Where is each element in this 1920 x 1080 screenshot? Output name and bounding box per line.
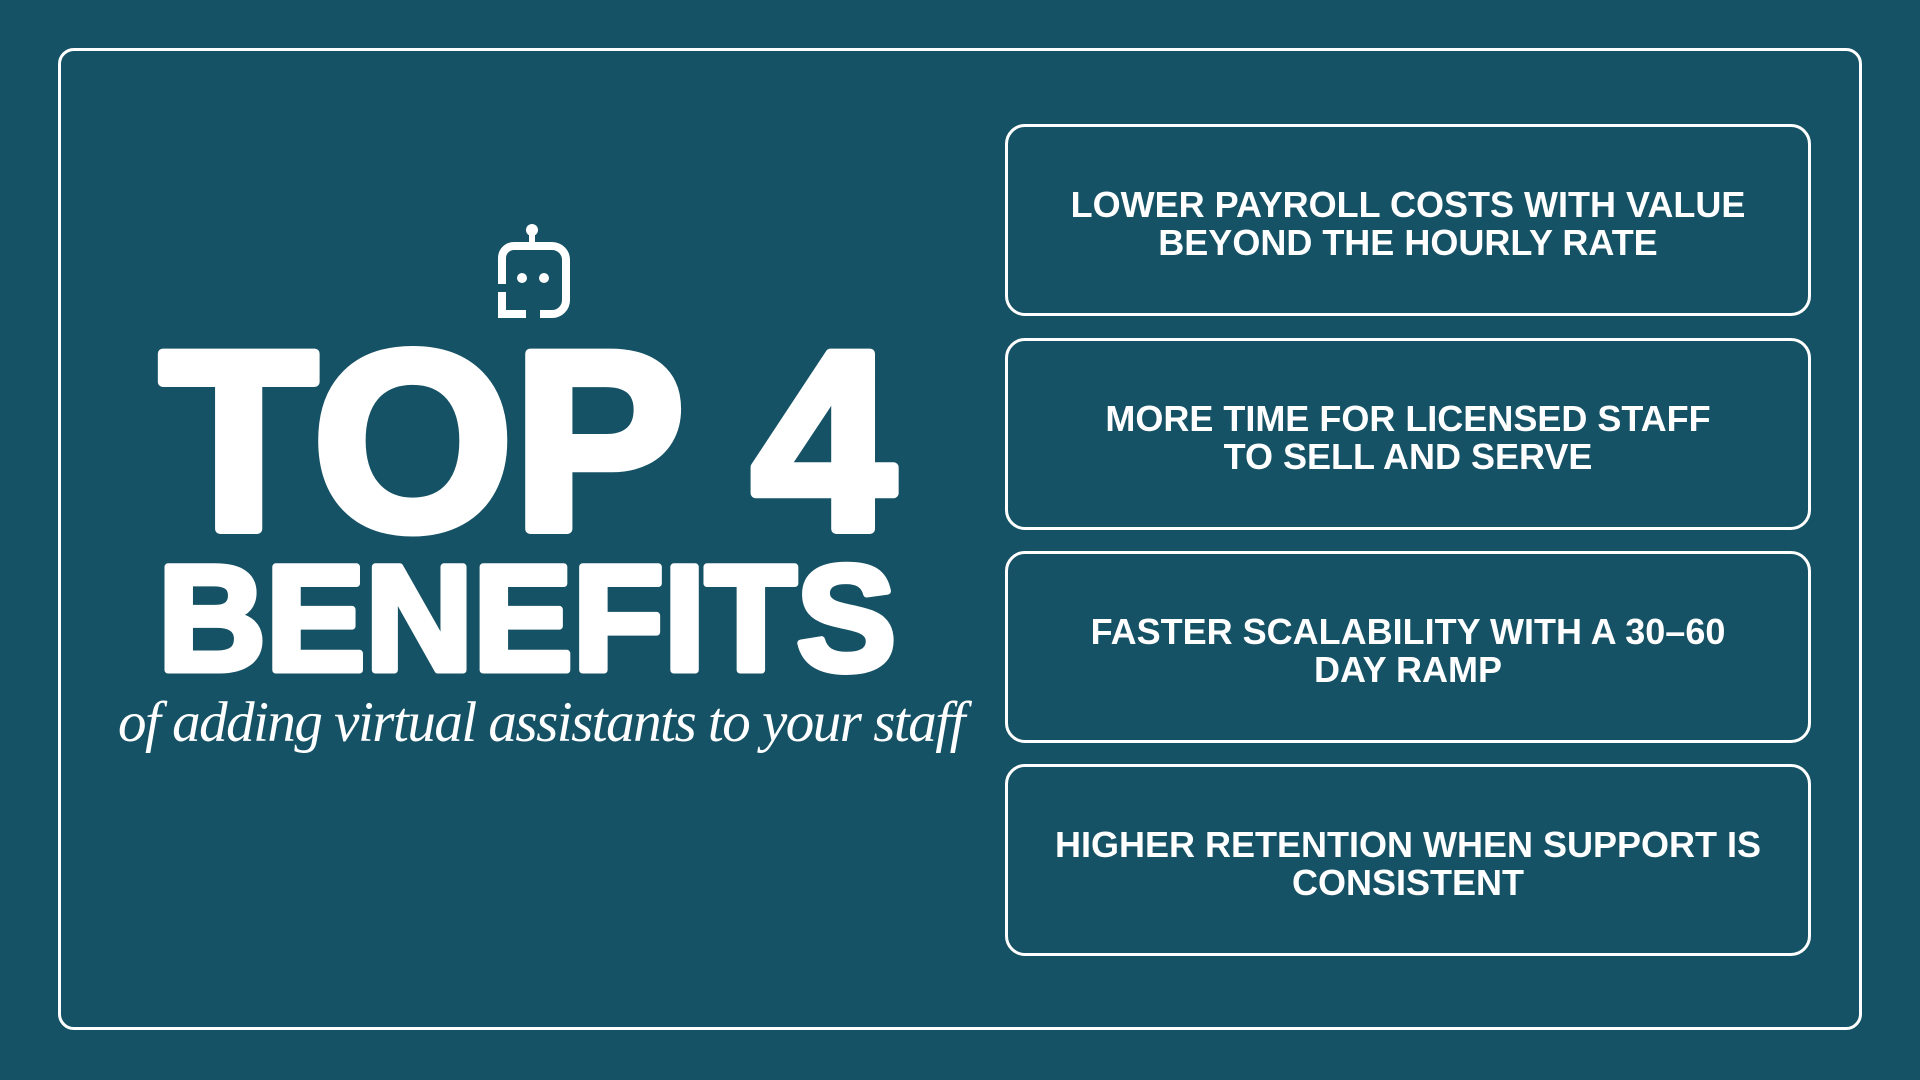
panel: benefit 3 xyxy=(1005,551,1811,743)
panel: benefit 4: HIGHER RETENTION WHEN SUPPORT IS xyxy=(1055,824,1761,865)
panel: benefit 2: TO SELL AND SERVE xyxy=(1224,436,1592,477)
subtitle: of adding virtual assistants to your staff xyxy=(118,691,964,754)
panel: benefit 3: DAY RAMP xyxy=(1314,649,1502,690)
panel: benefit 1: BEYOND THE HOURLY RATE xyxy=(1158,222,1658,263)
panel: benefit 3: FASTER SCALABILITY WITH A 30–60 xyxy=(1091,611,1725,652)
panel: benefit 1: LOWER PAYROLL COSTS WITH VALUE xyxy=(1071,184,1745,225)
panel: benefit 4: CONSISTENT xyxy=(1292,862,1524,903)
panel: benefit 2 xyxy=(1005,338,1811,530)
panel: benefit 1 xyxy=(1005,124,1811,316)
panel: benefit 2: MORE TIME FOR LICENSED STAFF xyxy=(1105,398,1711,439)
title xyxy=(158,340,899,685)
icon: robot xyxy=(498,224,570,318)
panel: benefit 4 xyxy=(1005,764,1811,956)
